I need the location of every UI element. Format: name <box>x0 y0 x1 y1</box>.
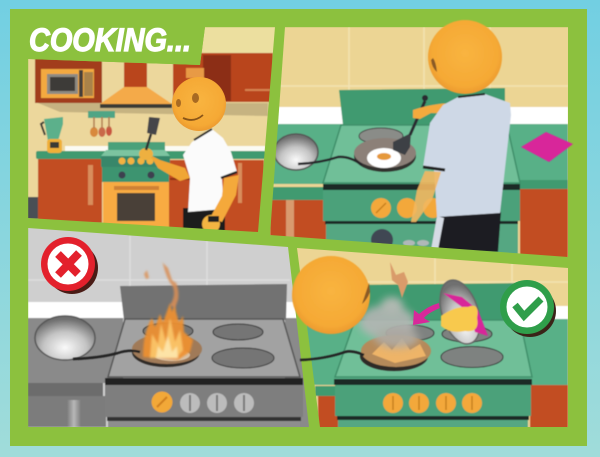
panel: burning pan (wrong) <box>28 225 313 430</box>
burners <box>143 323 274 368</box>
panel: covering the pan (right) <box>295 245 570 430</box>
lower cabinets <box>38 159 264 235</box>
cook head with smile <box>172 77 226 131</box>
hood shadow on wall <box>38 103 268 116</box>
wall cabinets <box>173 53 273 102</box>
pot <box>35 316 95 360</box>
shirt <box>423 94 511 217</box>
utensil rack <box>88 111 115 137</box>
stove backsplash <box>339 88 505 125</box>
arm lowered <box>411 171 441 222</box>
burning frying pan <box>73 334 202 367</box>
cook: t-shirt and arms <box>139 129 239 238</box>
oven dials <box>370 228 430 246</box>
burner <box>359 128 403 144</box>
stove <box>101 142 170 232</box>
head from behind <box>292 256 370 334</box>
pot holder <box>521 132 573 162</box>
badge: cross <box>41 237 98 294</box>
arm raised <box>412 102 446 120</box>
pot <box>274 134 318 170</box>
white splashback <box>65 146 265 151</box>
left cabinets <box>270 200 326 240</box>
microwave cabinet <box>35 58 102 103</box>
stove top <box>108 319 300 377</box>
flames <box>143 260 193 360</box>
stove backsplash <box>120 284 287 320</box>
badge: tick <box>500 280 556 337</box>
stove top <box>335 320 532 377</box>
panel: kitchen overview <box>28 27 278 238</box>
burners <box>386 325 503 368</box>
right cabinet <box>520 189 568 259</box>
head from behind <box>428 20 502 94</box>
floor tile <box>28 196 39 219</box>
knobs <box>383 393 482 413</box>
trousers <box>432 212 501 252</box>
knobs <box>152 392 254 413</box>
title: COOKING... <box>29 22 191 58</box>
spatula <box>146 117 160 150</box>
pink arrow <box>413 303 440 325</box>
flame wisps <box>390 262 408 298</box>
panel: frying an egg <box>265 27 570 259</box>
stove backsplash <box>361 282 516 320</box>
frying pan with egg <box>298 138 416 172</box>
title banner <box>10 9 275 65</box>
worktop <box>36 151 266 159</box>
smoke <box>359 297 419 348</box>
lid held with oven glove <box>433 275 488 349</box>
blender <box>41 117 63 153</box>
spatula <box>393 95 428 155</box>
knobs <box>371 198 443 218</box>
cooker hood <box>100 62 172 108</box>
stove top <box>323 125 520 183</box>
frying pan with food <box>300 335 431 371</box>
